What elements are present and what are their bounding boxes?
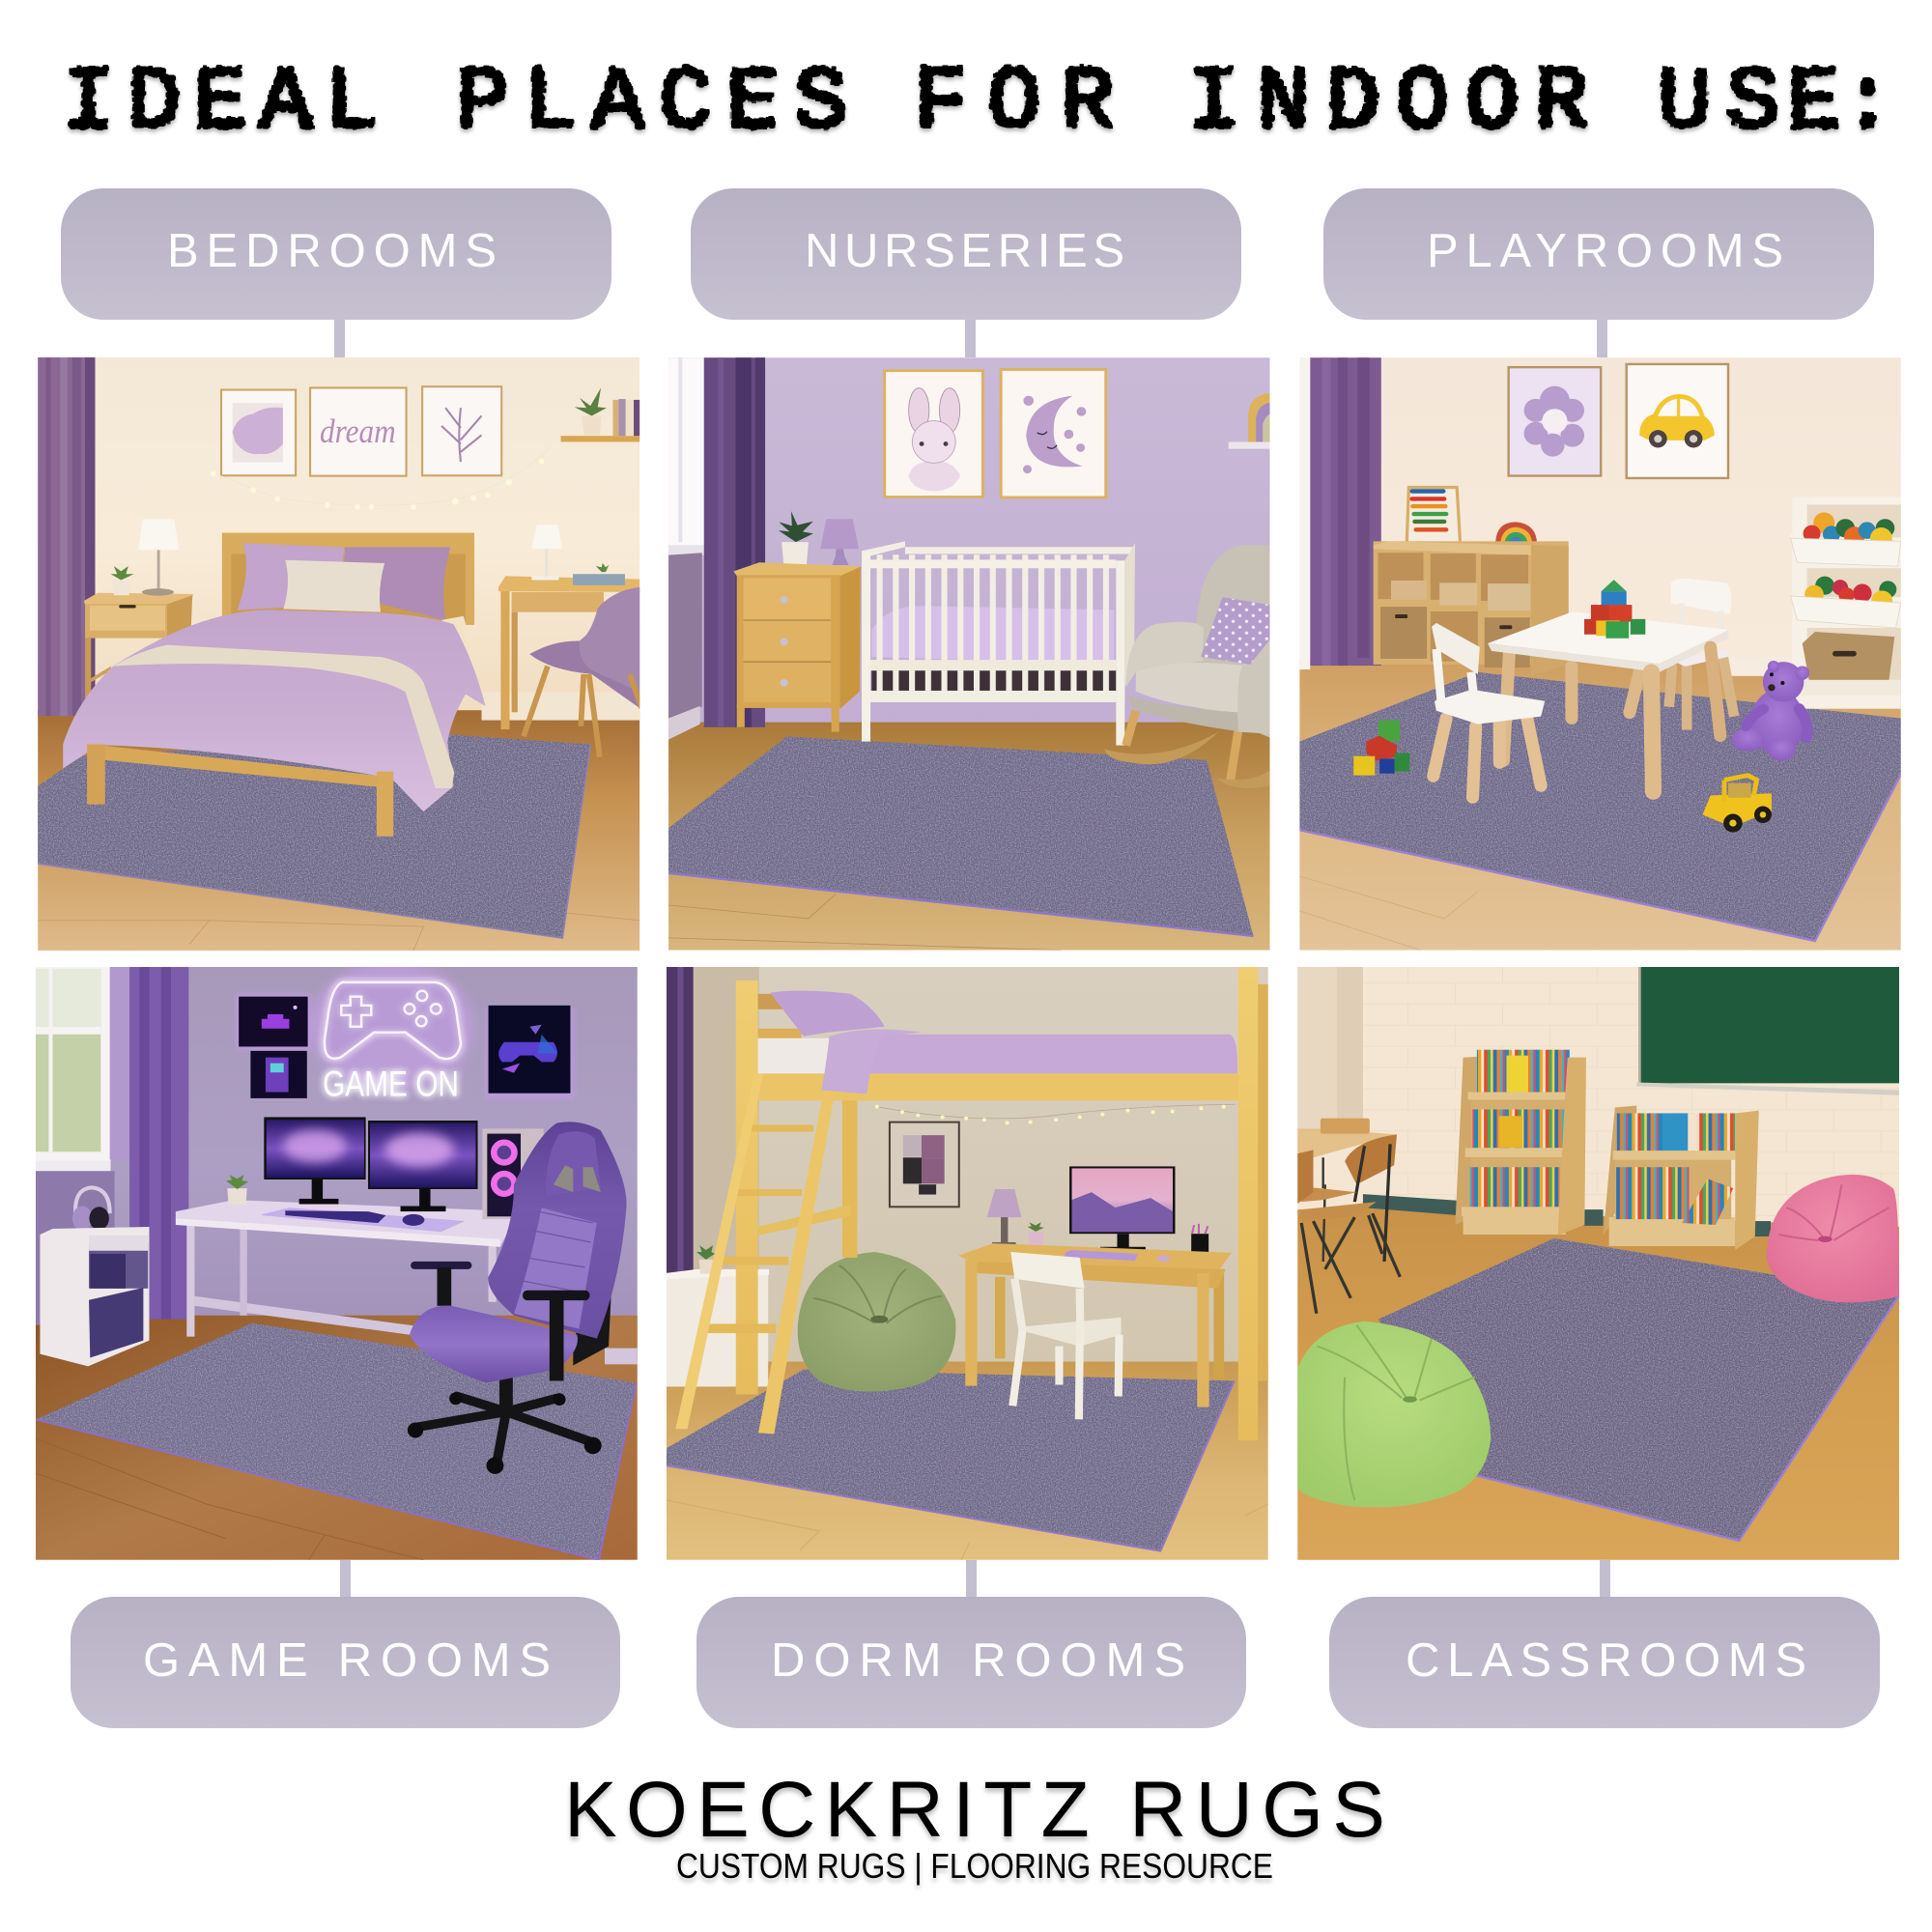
label: bedrooms: BEDROOMS [167, 225, 497, 277]
panel: bedroom scene [38, 357, 641, 951]
curtain [704, 357, 765, 727]
wall shelf [561, 387, 639, 441]
wall art: branch [422, 386, 501, 475]
wall art: dream: dream [320, 412, 396, 450]
front chair seat and back [1432, 623, 1545, 724]
fairy lights [875, 1104, 1236, 1124]
rug [1378, 1238, 1899, 1541]
panel: game room scene [36, 961, 638, 1560]
rug [38, 734, 590, 938]
rug [36, 1323, 637, 1560]
label: game rooms: GAME ROOMS [143, 1634, 551, 1687]
poster: gamepad [486, 1006, 575, 1099]
dual monitors [264, 1117, 478, 1211]
panel: nursery scene [668, 357, 1270, 951]
bedding [843, 1035, 1237, 1073]
right armrest [523, 1291, 589, 1380]
table legs [1503, 651, 1639, 761]
framed print [890, 1122, 959, 1207]
table lamp [111, 519, 179, 596]
desk [176, 1200, 518, 1337]
pc tower [482, 1128, 544, 1219]
headphones [72, 1187, 110, 1231]
panel: classroom scene [1297, 967, 1899, 1560]
desk chair [524, 587, 641, 757]
wall art: dream [310, 387, 407, 476]
label: classrooms: CLASSROOMS [1406, 1634, 1806, 1687]
baseboard [1363, 1194, 1460, 1215]
green beanbag [1297, 1321, 1491, 1507]
dresser [733, 562, 861, 732]
rocking chair [1104, 545, 1270, 788]
chalkboard [1636, 967, 1899, 1095]
desk chair [1010, 1252, 1122, 1419]
label: nurseries [691, 188, 1241, 357]
window [36, 967, 115, 1325]
pillow [770, 991, 885, 1037]
duvet [63, 610, 486, 811]
pink beanbag [1767, 1175, 1899, 1302]
baseboard [194, 1296, 423, 1337]
rug [667, 1370, 1235, 1551]
ladder [675, 1073, 835, 1434]
bookcase: short [1604, 1105, 1759, 1250]
label: dorm rooms [696, 1560, 1246, 1728]
right storage shelf [1789, 497, 1901, 709]
gaming chair seat [410, 1306, 578, 1382]
curtain [38, 357, 95, 716]
abacus [1406, 488, 1460, 541]
neon glow [309, 961, 474, 1093]
teddy bear [1731, 661, 1809, 761]
table top [1488, 611, 1729, 791]
desk [958, 1243, 1232, 1407]
cubby shelf [1374, 541, 1569, 676]
side table [667, 1245, 769, 1386]
label: nurseries: NURSERIES [805, 225, 1124, 277]
beanbag [798, 1252, 955, 1392]
bookcase: tall [1455, 1050, 1586, 1236]
loft rail [758, 1073, 1238, 1100]
panel: dorm room scene [667, 967, 1268, 1560]
wall art: bunny [885, 371, 982, 497]
label: game rooms [71, 1560, 620, 1728]
curtain [667, 967, 694, 1277]
label: playrooms: PLAYROOMS [1427, 225, 1783, 277]
rug [1299, 672, 1901, 941]
neon controller sign [325, 982, 461, 1059]
desk [498, 525, 639, 729]
wall art: flower [1509, 367, 1601, 476]
label: dorm rooms: DORM ROOMS [771, 1634, 1185, 1687]
crib [862, 541, 1135, 746]
title: IDEAL PLACES FOR INDOOR USE: [62, 52, 1894, 154]
poster: invader [236, 994, 311, 1050]
throw blanket [113, 645, 454, 788]
table back chair [1669, 579, 1734, 730]
panel: playroom scene [1299, 357, 1901, 951]
neon text: GAME ON [323, 1064, 459, 1103]
table and chairs [1297, 1119, 1400, 1314]
loft bed uprights [736, 967, 1268, 1440]
mattress side [441, 616, 466, 625]
mattress [758, 1038, 844, 1073]
bed frame [87, 744, 393, 837]
mouse pad and keyboard [262, 1208, 465, 1232]
poster: arcade [250, 1051, 307, 1098]
monitor [1069, 1166, 1175, 1252]
brand name: KOECKRITZ RUGS [564, 1766, 1385, 1854]
desk lamp and plant [987, 1189, 1208, 1254]
pillows [238, 543, 450, 620]
block tower [1584, 580, 1645, 639]
plant [226, 1175, 248, 1205]
label: classrooms [1329, 1560, 1880, 1728]
toy truck [1702, 776, 1772, 833]
front chair [1434, 719, 1541, 797]
curtain [110, 967, 188, 1320]
wall art: cloud [221, 390, 296, 475]
label: playrooms [1323, 188, 1874, 357]
tagline: CUSTOM RUGS | FLOORING RESOURCE [676, 1846, 1273, 1886]
nightstand [84, 593, 193, 698]
headboard [222, 533, 474, 625]
toy rainbow [1495, 522, 1537, 545]
window and curtain [1299, 357, 1381, 669]
storage cube [40, 1227, 150, 1366]
wall art: moon [1001, 370, 1106, 497]
rainbow shelf [1229, 393, 1270, 449]
plant and lamp [779, 511, 859, 565]
folded blanket [821, 1030, 922, 1094]
gaming chair back [488, 1122, 627, 1339]
wall art: toy car [1627, 364, 1728, 478]
chair base [408, 1377, 602, 1474]
floor blocks [1353, 721, 1409, 776]
left armrest [411, 1262, 471, 1306]
string lights [211, 454, 545, 510]
window [668, 357, 704, 740]
rug [668, 736, 1253, 936]
back bracket [573, 1281, 611, 1366]
label: bedrooms [61, 188, 611, 357]
